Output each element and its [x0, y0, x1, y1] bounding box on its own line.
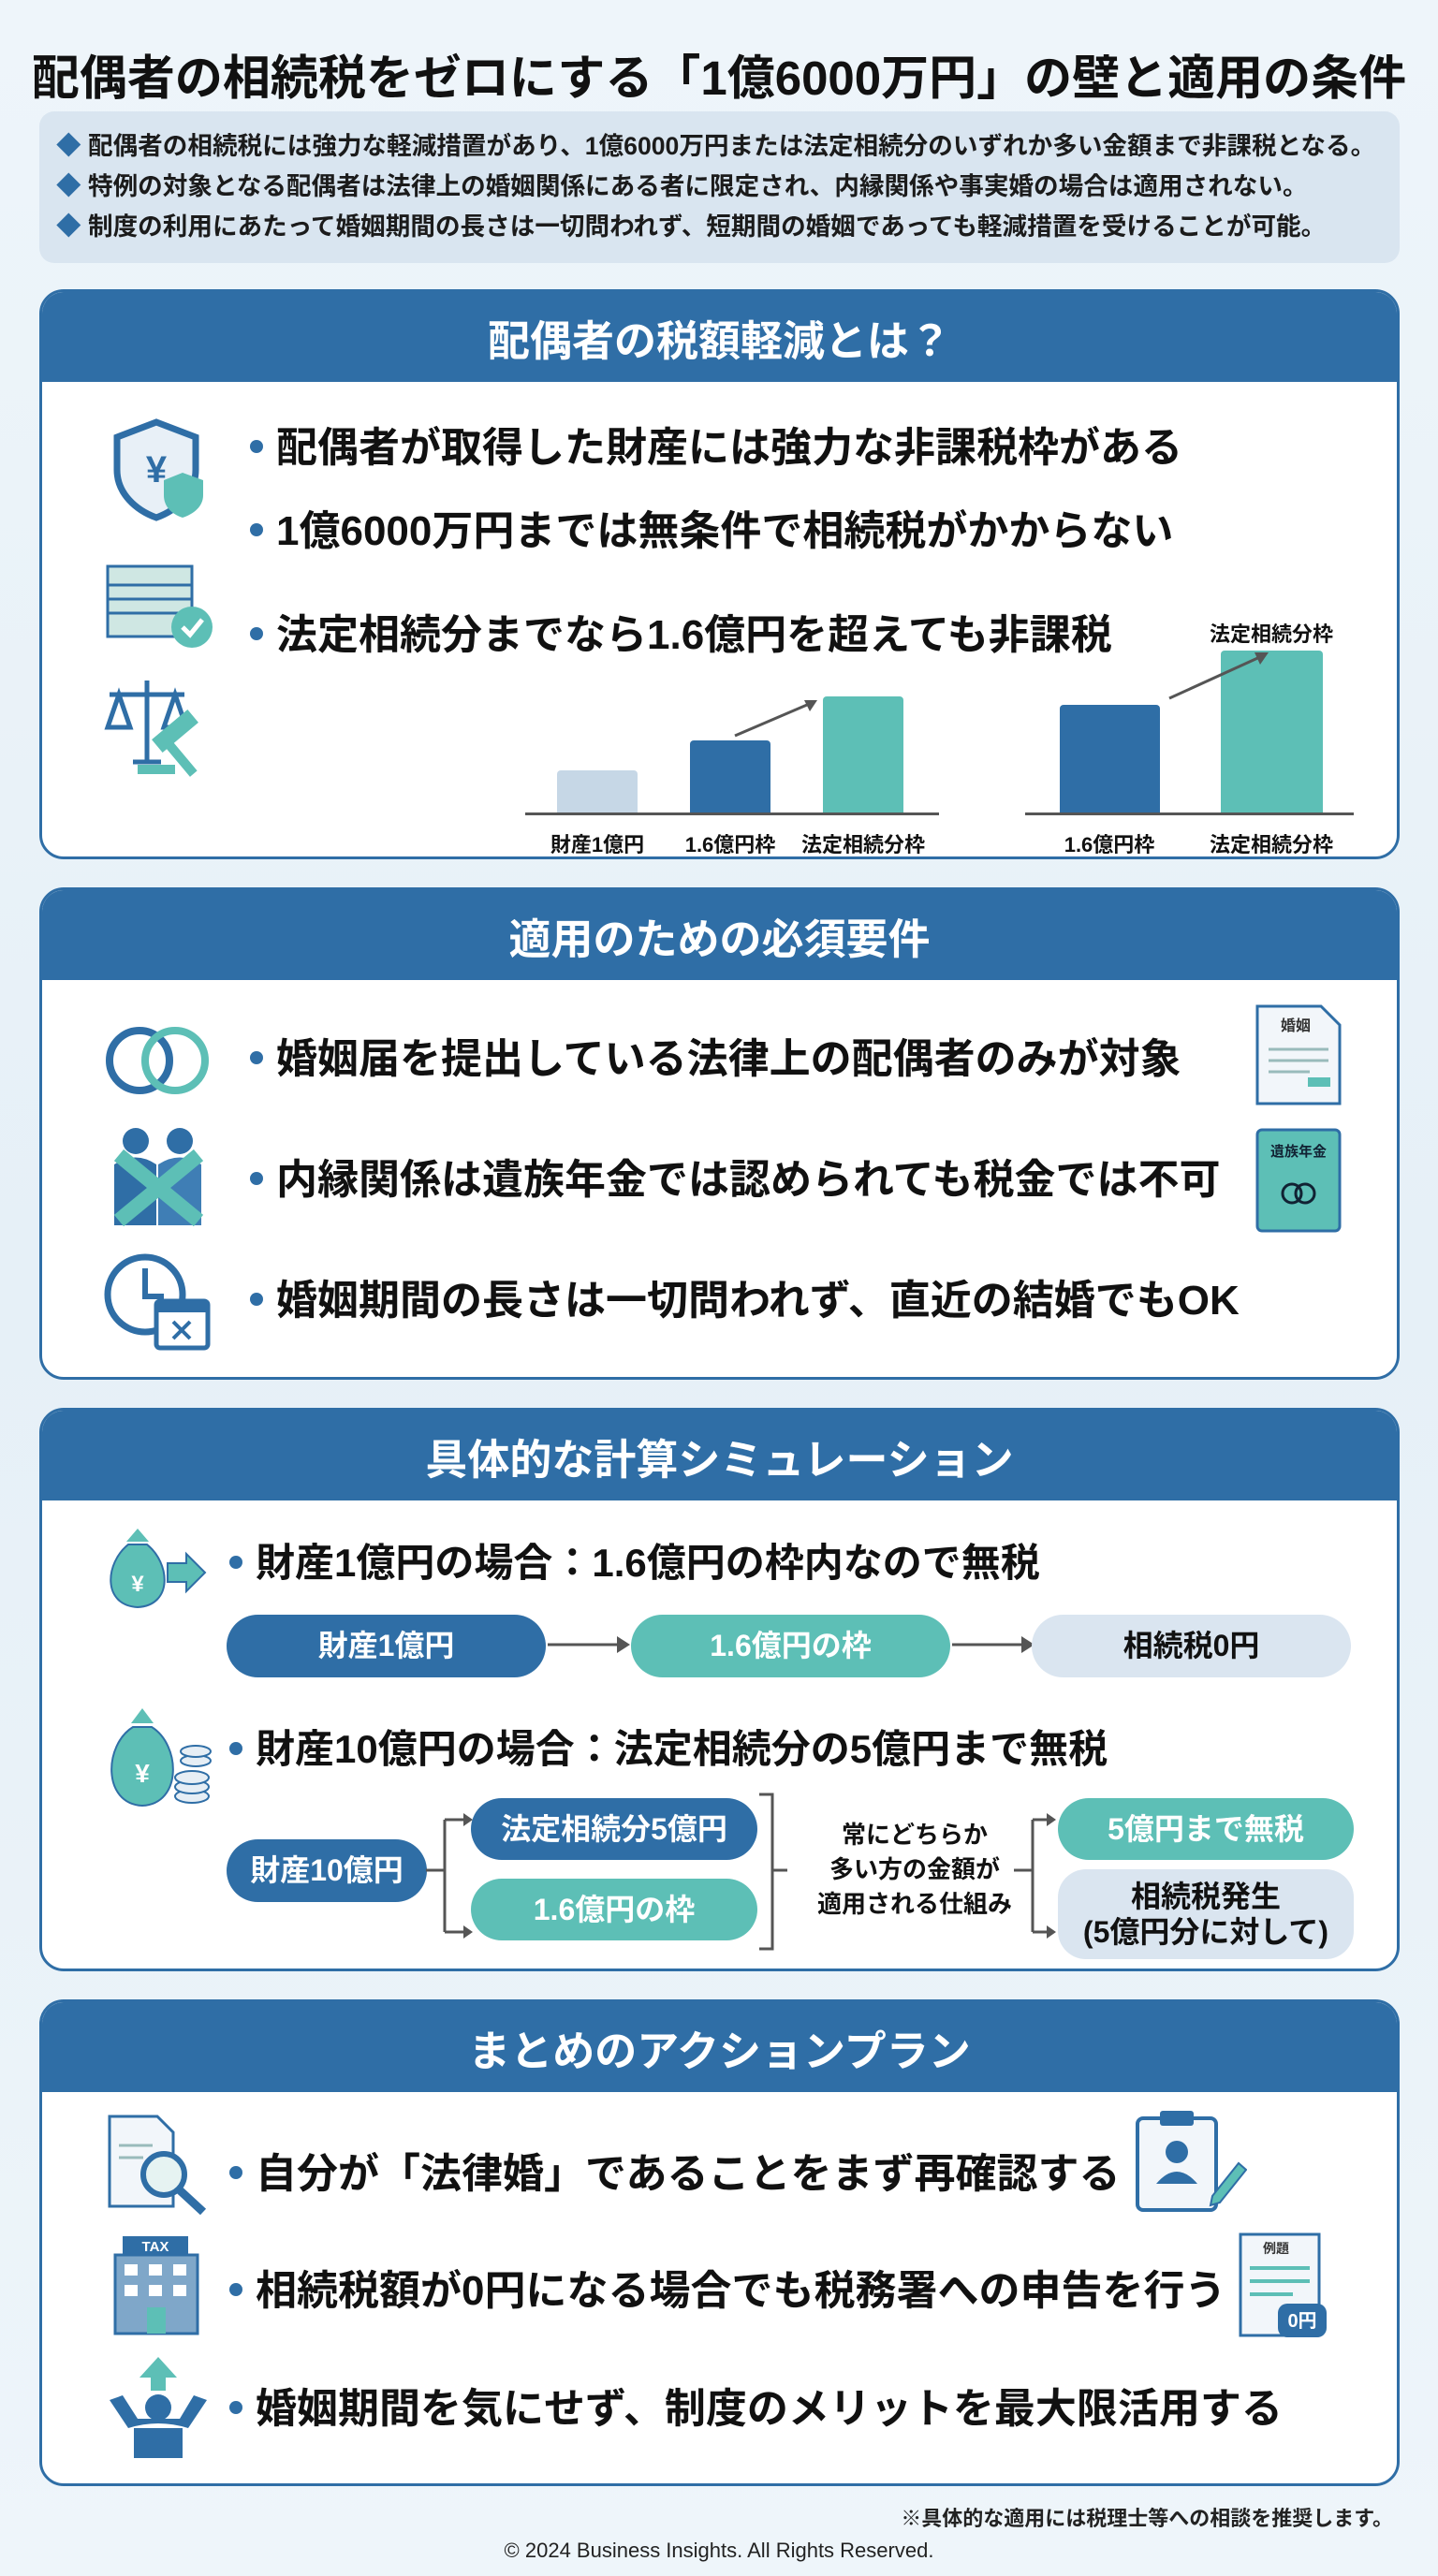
summary box: ◆ 特例の対象となる配偶者は法律上の婚姻関係にある者に限定され、内縁関係や事実婚の場合は適用されない。 [56, 172, 1308, 200]
flow: case 2: 法定相続分5億円 [501, 1812, 727, 1846]
summary box [39, 111, 1400, 263]
panel: 適用のための必須要件: 婚姻期間の長さは一切問われず、直近の結婚でもOK [276, 1278, 1240, 1324]
icon: shield: ¥ [146, 449, 168, 490]
chart: comparison bar chart: 法定相続分枠 [1210, 833, 1333, 856]
flow: case 2: 5億円まで無税 [1108, 1812, 1304, 1846]
icon: clipboard person pencil [1136, 2111, 1247, 2212]
center explanation: 多い方の金額が [829, 1855, 1000, 1883]
center explanation: 常にどちらか [842, 1821, 988, 1849]
chart: comparison bar chart: 1.6億円枠 [1064, 833, 1154, 856]
heading: 具体的な計算シミュレーション [425, 1436, 1014, 1483]
icon: tax office building [114, 2236, 198, 2334]
icon: tax office building: TAX [142, 2239, 169, 2255]
icon: marriage document [1256, 1005, 1341, 1105]
panel: 具体的な計算シミュレーション [39, 1408, 1400, 1971]
icon: pension book [1256, 1129, 1341, 1232]
panel: 配偶者の税額軽減とは: 法定相続分までなら1.6億円を超えても非課税 [276, 612, 1112, 658]
flow: case 1: 財産1億円 [318, 1629, 454, 1662]
icon: pension book: 遺族年金 [1270, 1143, 1327, 1160]
chart: comparison bar chart [1025, 622, 1354, 856]
panel: 配偶者の税額軽減とは [39, 289, 1400, 859]
icon: person up arrow [110, 2357, 207, 2458]
bullet: case 2: 財産10億円の場合：法定相続分の5億円まで無税 [256, 1727, 1108, 1771]
icon: clock calendar [105, 1254, 210, 1350]
title: 配偶者の相続税をゼロにする「1億6000万円」の壁と適用の条件 [32, 51, 1406, 105]
panel: 適用のための必須要件 [39, 887, 1400, 1380]
icon: document magnifier [109, 2115, 206, 2215]
icon: shield [114, 418, 203, 521]
icon: tax return zero yen: 例題 [1263, 2241, 1289, 2256]
flow: case 1: 相続税0円 [1123, 1629, 1259, 1662]
icon: crossed couple [114, 1128, 203, 1226]
panel: 適用のための必須要件: 内縁関係は遺族年金では認められても税金では不可 [276, 1157, 1220, 1203]
flow: case 2 [227, 1793, 1354, 1959]
icon: tax return zero yen [1240, 2233, 1327, 2337]
flow: case 2: 相続税発生 [1131, 1880, 1281, 1913]
footnote: ※具体的な適用には税理士等への相談を推奨します。 [901, 2507, 1393, 2530]
panel: まとめのアクションプラン: 婚姻期間を気にせず、制度のメリットを最大限活用する [256, 2386, 1283, 2432]
heading [42, 890, 1397, 980]
summary box: ◆ 配偶者の相続税には強力な軽減措置があり、1億6000万円または法定相続分のいずれか多い金額まで非課税となる。 [56, 132, 1375, 160]
icon: marriage document: 婚姻 [1281, 1017, 1311, 1034]
center explanation: 適用される仕組み [817, 1890, 1012, 1918]
bullet texts: 配偶者が取得した財産には強力な非課税枠がある [276, 425, 1182, 471]
heading [42, 1411, 1397, 1500]
panel: まとめのアクションプラン: 相続税額が0円になる場合でも税務署への申告を行う [256, 2268, 1225, 2314]
heading [42, 292, 1397, 382]
chart: small bar chart: 1.6億円枠 [685, 833, 775, 856]
chart: small bar chart: 財産1億円 [550, 833, 644, 856]
heading: 適用のための必須要件 [508, 915, 931, 962]
icon: rings [106, 1027, 209, 1094]
icon: scales and gavel [105, 681, 198, 777]
heading: まとめのアクションプラン [468, 2027, 971, 2074]
icon: tax return zero yen: 0円 [1287, 2311, 1317, 2332]
flow: case 2: (5億円分に対して) [1083, 1915, 1328, 1949]
chart: comparison bar chart: 法定相続分枠 [1210, 622, 1333, 646]
flow: case 2: 財産10億円 [250, 1853, 404, 1887]
icon: money bag with arrow: ¥ [131, 1572, 144, 1597]
flow: case 1 [227, 1615, 1351, 1677]
chart: small bar chart [525, 696, 939, 856]
bullet: case 1: 財産1億円の場合：1.6億円の枠内なので無税 [256, 1541, 1040, 1585]
panel: 配偶者の税額軽減とは: 1億6000万円までは無条件で相続税がかからない [276, 508, 1173, 554]
chart: small bar chart: 法定相続分枠 [801, 833, 925, 856]
icon: money [107, 565, 213, 648]
flow: case 2: 1.6億円の枠 [534, 1893, 695, 1926]
heading: 配偶者の税額軽減とは？ [488, 316, 951, 365]
flow: case 1: 1.6億円の枠 [710, 1629, 872, 1662]
center explanation [817, 1821, 1012, 1918]
bullet texts: 自分が「法律婚」であることをまず再確認する [256, 2151, 1121, 2197]
summary box: ◆ 制度の利用にあたって婚姻期間の長さは一切問われず、短期間の婚姻であっても軽減措置を受けることが可能。 [56, 212, 1326, 241]
icon: money bag with arrow [110, 1529, 206, 1608]
copyright: © 2024 Business Insights. All Rights Reserved. [505, 2539, 933, 2562]
icon: money bag with coins [110, 1708, 212, 1807]
icon: money bag with coins: ¥ [135, 1759, 150, 1788]
panel: まとめのアクションプラン [39, 1999, 1400, 2486]
heading [42, 2002, 1397, 2092]
bullet texts: 婚姻届を提出している法律上の配偶者のみが対象 [276, 1036, 1181, 1082]
